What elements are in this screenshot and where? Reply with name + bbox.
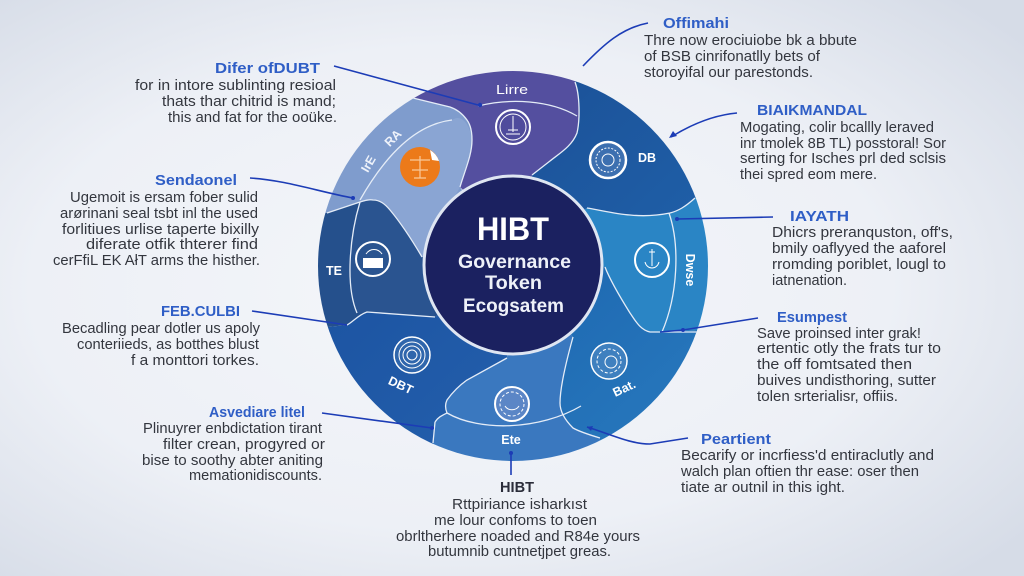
arrow: Peartient (587, 426, 688, 444)
hub subtitle: Ecogsatem (463, 295, 564, 317)
segment labels: Bat. (611, 377, 638, 400)
body: for in intore sublinting resioal (135, 78, 336, 94)
body: ertentic otly the frats tur to (757, 341, 941, 357)
arrow: Esumpest (660, 318, 758, 332)
body: bise to soothy abter aniting (142, 453, 323, 469)
body: memationidiscounts. (189, 468, 322, 484)
body (142, 421, 325, 484)
heading: HIBT (500, 479, 534, 496)
body (53, 190, 260, 269)
segment labels: Dwse (683, 254, 697, 286)
callout: Esumpest (757, 309, 941, 405)
body: walch plan oftien thr ease: oser then (680, 464, 919, 480)
callout: Offimahi (644, 15, 857, 81)
icon: DB (590, 142, 626, 178)
body: of BSB cinrifonatlly bets of (644, 49, 821, 65)
body: thats thar chitrid is mand; (162, 94, 336, 110)
segment labels: DB (638, 151, 656, 165)
segment labels: TE (326, 264, 342, 278)
body: f a monttori torkes. (131, 353, 259, 369)
body: serting for Isches prl ded sclsis (740, 151, 946, 167)
hub subtitle (458, 251, 571, 317)
icon: orange (400, 147, 440, 187)
icon: DBT (394, 337, 430, 373)
hub title: HIBT (477, 211, 549, 247)
segment labels (326, 83, 697, 447)
segment labels: Ete (501, 433, 521, 447)
body: this and fat for the ooüke. (168, 110, 337, 126)
segment: bottom right blue (560, 267, 698, 440)
body (62, 321, 261, 369)
body (680, 448, 934, 496)
body: bmily oaflyyed the aaforel (772, 241, 946, 257)
segment labels: DBT (386, 374, 416, 397)
segment: left navy (318, 200, 438, 327)
hub subtitle: Token (485, 272, 542, 294)
body: cerFfiL EK AłT arms the histher. (53, 253, 260, 269)
segment: bottom blue (433, 334, 600, 461)
segment labels: Lirre (496, 83, 528, 97)
heading: Peartient (701, 431, 771, 448)
segment labels: RA (382, 127, 405, 150)
body: obrltherhere noaded and R84e yours (396, 529, 640, 545)
body: thei spred eom mere. (740, 167, 877, 183)
body: forlitiues urlise taperte bixilly (62, 222, 260, 238)
arrow: Difer ofDUBT (334, 66, 482, 107)
segment labels: IrE (358, 153, 379, 175)
body (772, 225, 953, 289)
arrow: Offimahi (583, 23, 648, 66)
body: storoyifal our parestonds. (644, 65, 813, 81)
heading: BIAIKMANDAL (757, 102, 867, 119)
body: Dhicrs preranquston, off's, (772, 225, 953, 241)
body: conteriieds, as botthes blust (77, 337, 259, 353)
segment: right light blue (584, 198, 708, 332)
heading: IAYATH (790, 208, 849, 225)
arrow: Asvediare litel (322, 413, 434, 430)
segment: upper left periwinkle (326, 98, 472, 257)
body: diferate otfik thterer find (86, 237, 258, 253)
hub subtitle: Governance (458, 251, 571, 273)
callout: Sendaonel (53, 172, 260, 269)
body: inr tmolek 8B TL) posstoral! Sor (740, 136, 946, 152)
white dividers (413, 98, 472, 187)
heading: Sendaonel (155, 172, 237, 189)
body (396, 497, 640, 560)
callout: BIAIKMANDAL (740, 102, 946, 183)
heading: Offimahi (663, 15, 729, 32)
body: tolen srterialisr, offiis. (757, 389, 898, 405)
segment: top purple (414, 71, 578, 190)
body: tiate ar outnil in this ight. (681, 480, 845, 496)
heading: Esumpest (777, 309, 847, 326)
body: me lour confoms to toen (434, 513, 597, 529)
callout: IAYATH (772, 208, 953, 289)
ecosystem wheel (318, 71, 708, 461)
icon: top (496, 110, 530, 144)
arrow: FEB.CULBI (252, 311, 347, 325)
body: filter crean, progyred or (163, 437, 325, 453)
body: the off fomtsated then (757, 357, 912, 373)
heading: Difer ofDUBT (215, 60, 321, 77)
segment: top right dark blue (532, 81, 696, 215)
body: Ugemoit is ersam fober sulid (70, 190, 258, 206)
body: Plinuyrer enbdictation tirant (143, 421, 322, 437)
body: Save proinsed inter grak! (757, 326, 921, 342)
body: Rttpiriance isharkıst (452, 497, 587, 513)
arrow: HIBT bottom (509, 451, 513, 475)
body: arørinani seal tsbt inl the used (60, 206, 258, 222)
body: buives undisthoring, sutter (757, 373, 936, 389)
callout: Asvediare litel (142, 404, 325, 484)
callout: FEB.CULBI (62, 303, 261, 369)
callout: HIBT (396, 479, 640, 560)
body: Becadling pear dotler us apoly (62, 321, 261, 337)
body: rromding poriblet, lougl to (772, 257, 946, 273)
icon: TE (356, 242, 390, 276)
body (740, 120, 946, 183)
icon: bottom (495, 387, 529, 421)
body: Thre now erociuiobe bk a bbute (644, 33, 857, 49)
icon: Bat (591, 343, 627, 379)
arrow: Sendaonel (250, 178, 355, 200)
body (757, 326, 941, 405)
body (135, 78, 337, 126)
icon: right (635, 243, 669, 277)
heading: Asvediare litel (209, 404, 305, 421)
center hub (424, 176, 602, 354)
segment: bottom left blue (328, 312, 508, 444)
callout: Peartient (680, 431, 934, 496)
body: Mogating, colir bcallly leraved (740, 120, 934, 136)
body: butumnib cuntnetjpet greas. (428, 544, 611, 560)
body (644, 33, 857, 81)
body: Becarify or incrfiess'd entiraclutly and (681, 448, 934, 464)
body: iatnenation. (772, 273, 847, 289)
band shading (360, 118, 472, 257)
arrow: BIAIKMANDAL (669, 113, 737, 138)
heading: FEB.CULBI (161, 303, 240, 320)
arrow: IAYATH (675, 217, 773, 221)
callout: Difer ofDUBT (135, 60, 337, 126)
